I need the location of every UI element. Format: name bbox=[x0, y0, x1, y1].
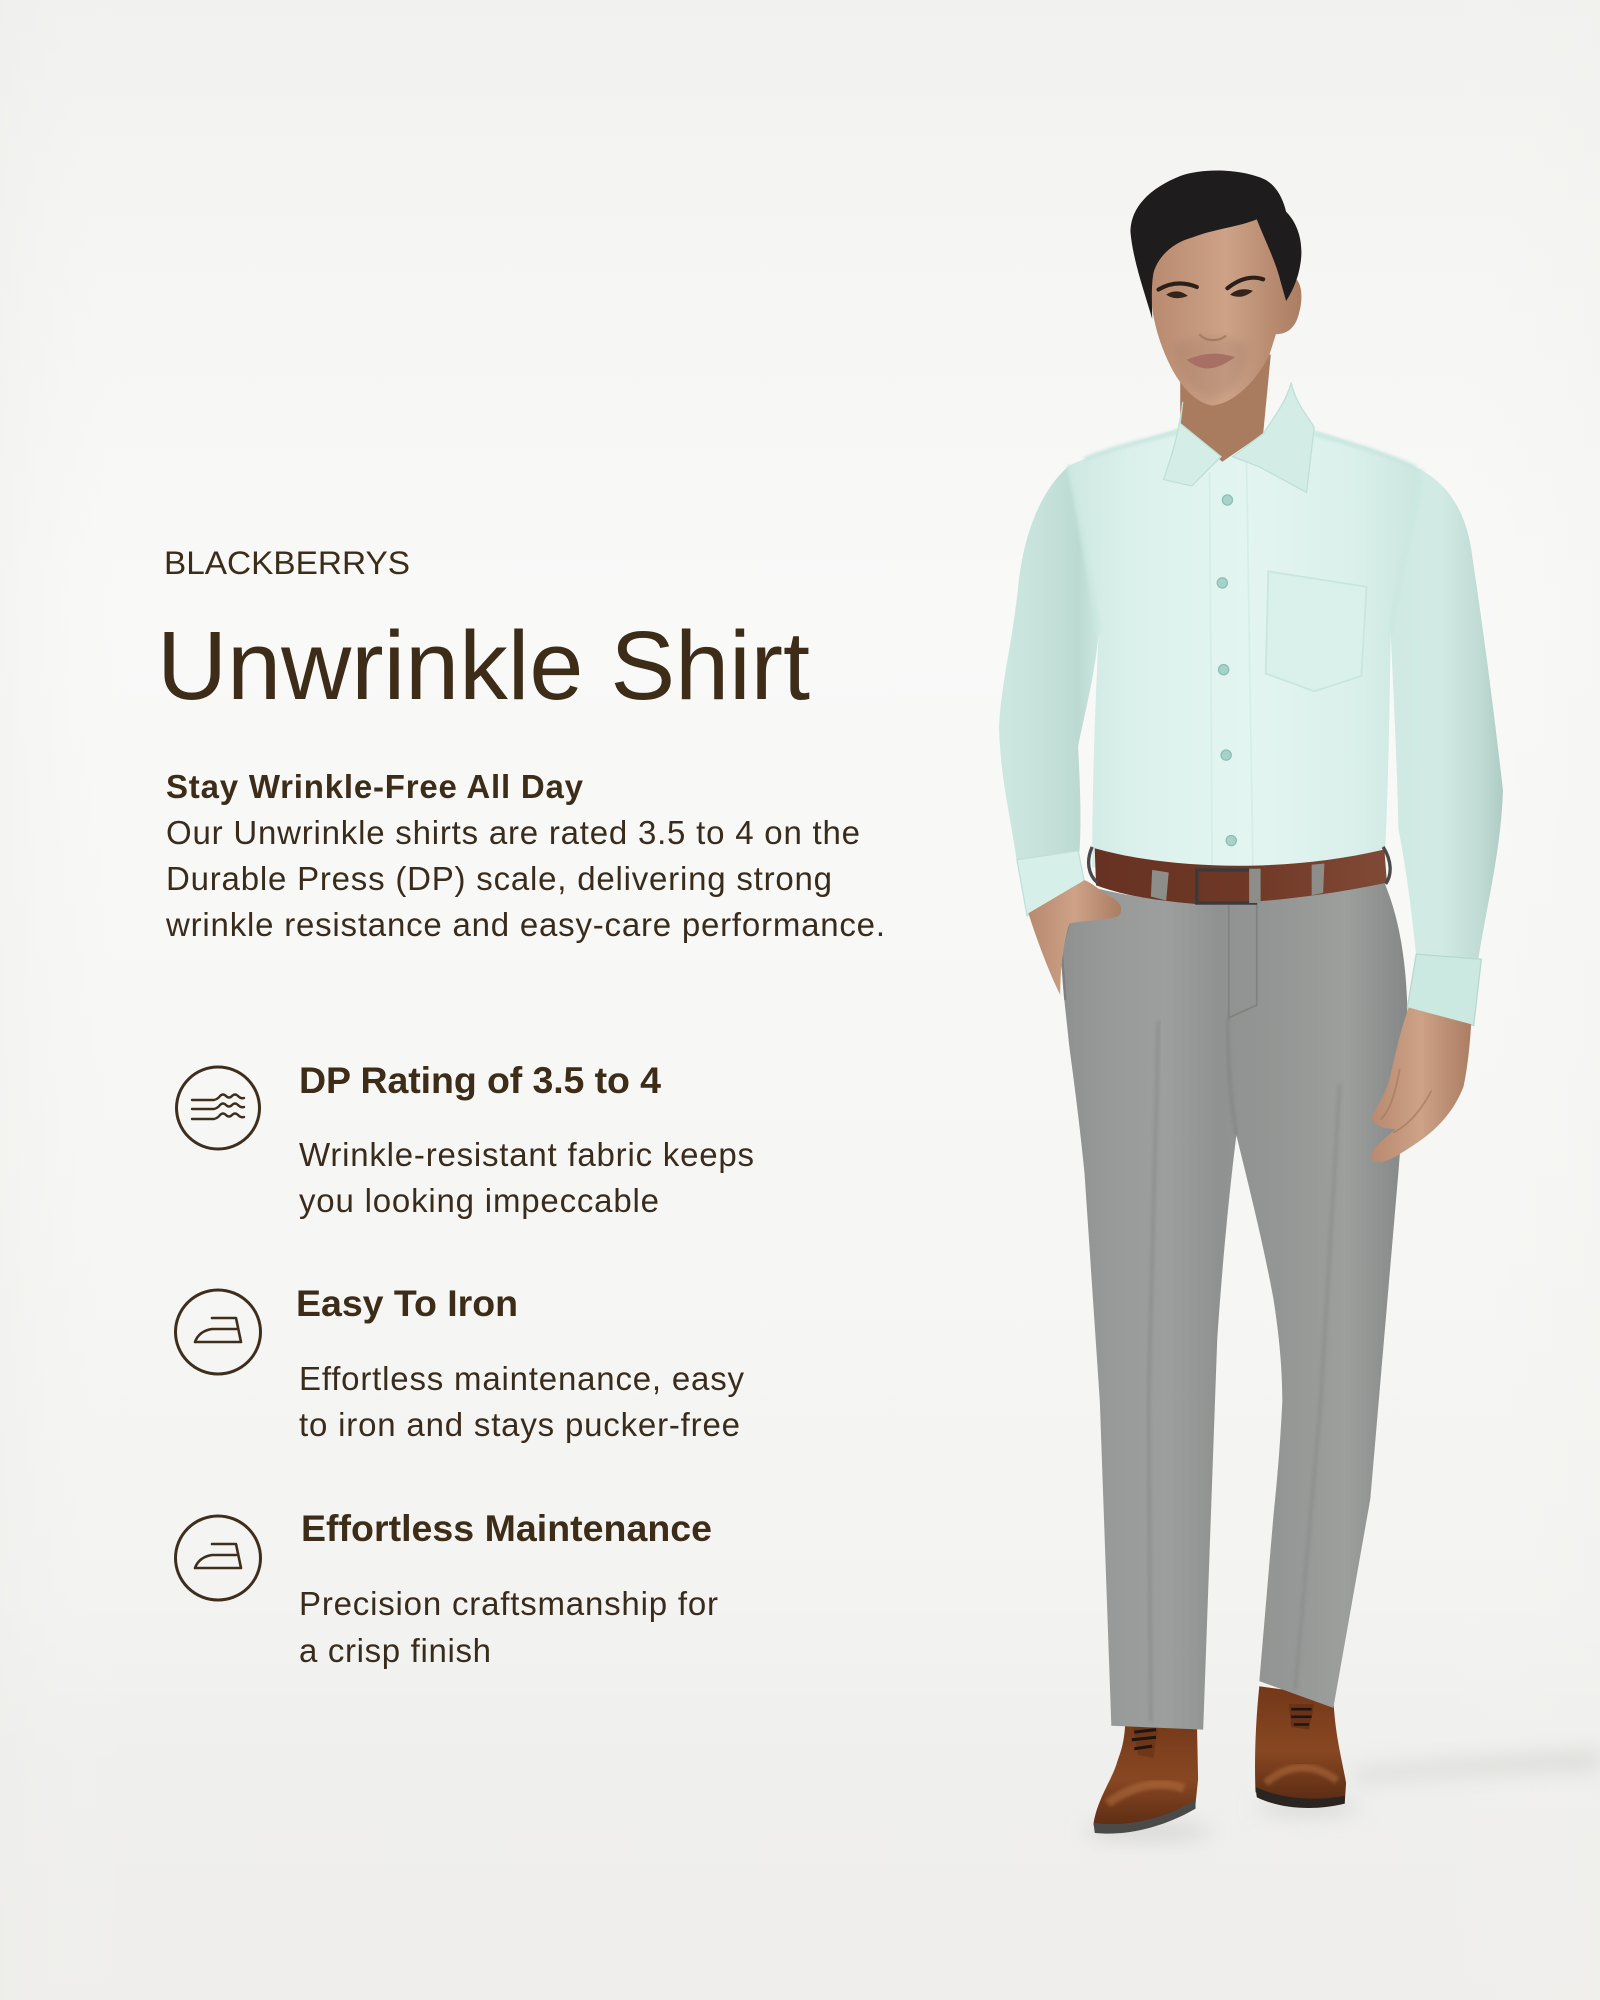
belt bbox=[1089, 847, 1390, 904]
left cuff bbox=[1017, 851, 1085, 916]
feature: DP rating: you looking impeccable bbox=[299, 1182, 659, 1219]
stubble bbox=[1174, 337, 1248, 398]
floor shadow bbox=[1085, 1750, 1600, 1839]
right shoe bbox=[1255, 1686, 1346, 1808]
intro text block: wrinkle resistance and easy-care performance. bbox=[165, 906, 885, 943]
feature: effortless maintenance bbox=[176, 1507, 718, 1669]
feature: effortless maintenance: Precision craftsmanship for bbox=[299, 1585, 718, 1622]
collar bbox=[1164, 383, 1314, 492]
icon: iron bbox=[176, 1516, 260, 1600]
feature: easy to iron bbox=[176, 1282, 744, 1443]
feature: effortless maintenance: Effortless Maintenance bbox=[301, 1507, 712, 1549]
lips bbox=[1187, 354, 1235, 368]
feature: easy to iron: Effortless maintenance, easy bbox=[299, 1360, 744, 1397]
hair bbox=[1130, 171, 1301, 319]
buttons bbox=[1217, 495, 1236, 846]
placket bbox=[1210, 462, 1253, 870]
feature: DP rating: Wrinkle-resistant fabric keeps bbox=[299, 1136, 754, 1173]
eyes bbox=[1166, 289, 1253, 298]
title: Unwrinkle Shirt bbox=[157, 611, 810, 720]
feature: effortless maintenance: a crisp finish bbox=[299, 1632, 491, 1669]
feature: easy to iron: to iron and stays pucker-free bbox=[299, 1406, 740, 1443]
head bbox=[1130, 171, 1301, 406]
left sleeve bbox=[999, 466, 1099, 862]
shirt bbox=[999, 427, 1503, 1026]
nose bbox=[1199, 334, 1226, 340]
right sleeve bbox=[1391, 469, 1503, 964]
feature: DP rating: DP Rating of 3.5 to 4 bbox=[299, 1059, 661, 1101]
intro text block: Stay Wrinkle-Free All Day bbox=[166, 768, 584, 805]
intro text block: Our Unwrinkle shirts are rated 3.5 to 4 on the bbox=[166, 814, 860, 851]
intro text block bbox=[165, 768, 885, 943]
face bbox=[1150, 204, 1301, 406]
neck bbox=[1180, 355, 1271, 462]
left shoe bbox=[1093, 1716, 1198, 1834]
intro text block: Durable Press (DP) scale, delivering strong bbox=[166, 860, 832, 897]
left hand in pocket bbox=[1028, 880, 1121, 995]
torso bbox=[1069, 427, 1420, 883]
pocket bbox=[1266, 571, 1367, 691]
icon: fabric waves bbox=[176, 1067, 260, 1149]
feature: easy to iron: Easy To Iron bbox=[296, 1282, 518, 1324]
eyebrows bbox=[1159, 278, 1263, 290]
right hand bbox=[1371, 1008, 1471, 1162]
feature: DP rating bbox=[176, 1059, 754, 1219]
brand name: BLACKBERRYS bbox=[164, 545, 410, 581]
model photo illustration bbox=[999, 171, 1600, 1839]
right cuff bbox=[1407, 954, 1481, 1026]
trousers bbox=[1062, 883, 1407, 1730]
icon: iron bbox=[176, 1290, 260, 1374]
